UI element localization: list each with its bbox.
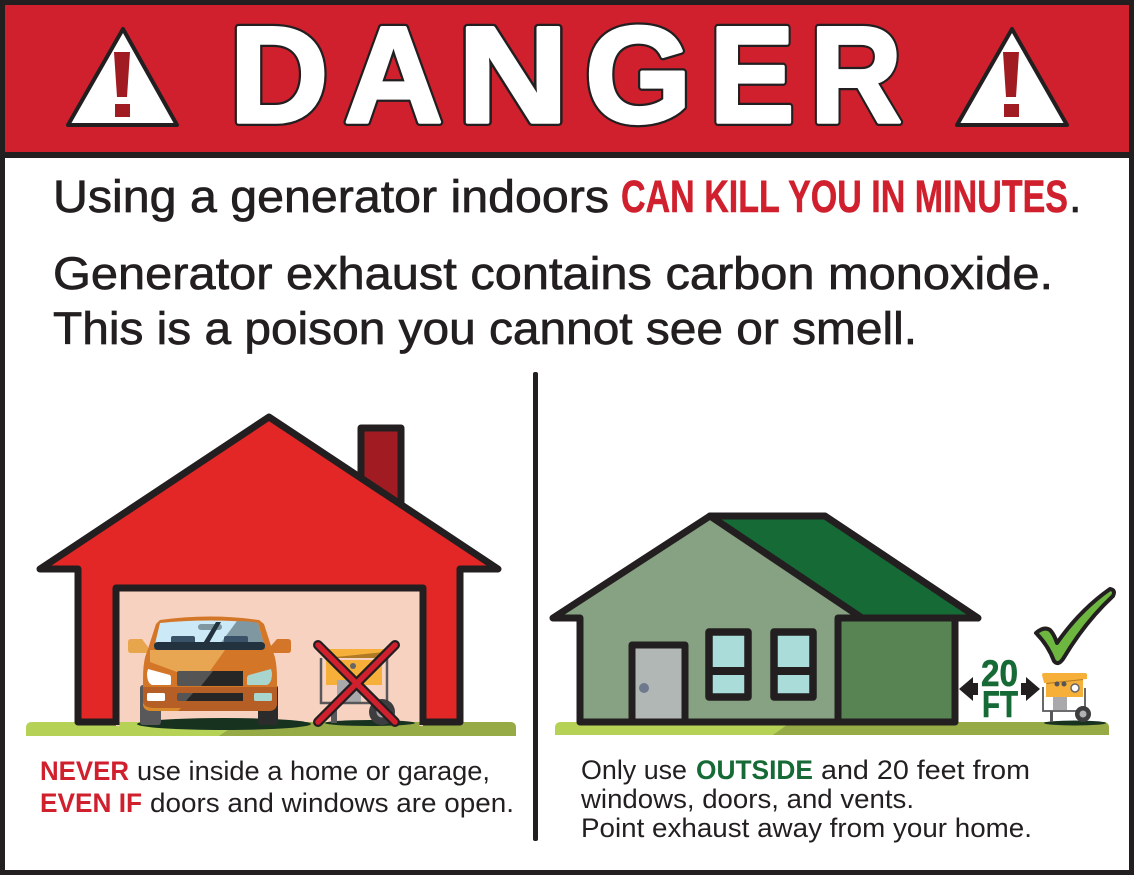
text block: carbon monoxide warning: This is a poison you cannot see or smell. — [53, 303, 917, 354]
icon: chimney — [361, 428, 401, 512]
caption: only use outside: Only use — [581, 755, 687, 785]
red house — [40, 417, 498, 722]
heading: DANGER: A — [344, 0, 443, 152]
icon: left warning triangle — [68, 29, 177, 125]
panel: safe outdoor use — [553, 516, 1114, 843]
label: 20 — [981, 653, 1018, 694]
heading: DANGER: N — [458, 0, 568, 152]
statement: can kill you in minutes: Using a generator indoors — [53, 171, 609, 222]
caption: only use outside — [580, 755, 1032, 843]
window left — [709, 632, 748, 697]
text block: carbon monoxide warning — [53, 248, 1053, 354]
heading: DANGER: E — [710, 0, 794, 152]
text block: carbon monoxide warning: Generator exhaust contains carbon monoxide. — [53, 248, 1053, 299]
label — [981, 653, 1018, 725]
heading: DANGER: D — [230, 0, 328, 152]
green house body — [553, 516, 862, 722]
side garage — [838, 618, 955, 722]
label: FT — [982, 684, 1018, 725]
heading: DANGER: G — [585, 0, 692, 152]
caption: only use outside: Point exhaust away from your home. — [581, 813, 1032, 843]
panel: unsafe indoor use — [26, 417, 516, 818]
ground — [555, 722, 1109, 735]
heading: DANGER: R — [810, 0, 902, 152]
door — [632, 645, 685, 722]
caption: never use inside — [40, 756, 514, 818]
caption: only use outside: windows, doors, and vents. — [580, 784, 914, 814]
icon: green check mark — [1036, 589, 1114, 663]
caption: only use outside: OUTSIDE — [696, 755, 813, 785]
heading: DANGER: E — [710, 0, 794, 152]
caption: only use outside: and 20 feet from — [821, 755, 1030, 785]
arrow right — [1021, 677, 1040, 701]
center divider — [533, 372, 538, 841]
heading: DANGER — [230, 0, 902, 152]
icon: generator — [1042, 673, 1106, 726]
distance marker: 20 ft — [959, 653, 1040, 725]
heading: DANGER: R — [810, 0, 902, 152]
caption: never use inside: use inside a home or garage, — [137, 756, 490, 786]
green roof — [710, 516, 978, 618]
window right — [774, 632, 813, 697]
caption: never use inside: doors and windows are open. — [150, 788, 514, 818]
arrow left — [959, 677, 978, 701]
ground — [26, 722, 516, 736]
heading: DANGER: G — [585, 0, 692, 152]
statement: can kill you in minutes: . — [1069, 171, 1082, 222]
icon: orange car — [128, 616, 291, 725]
caption: never use inside: EVEN IF — [40, 788, 142, 818]
garage opening — [116, 588, 423, 736]
heading: DANGER: A — [344, 0, 443, 152]
statement: can kill you in minutes — [53, 171, 1082, 222]
icon: generator crossed out — [318, 645, 415, 726]
car shadow — [137, 718, 311, 730]
heading: DANGER: D — [230, 0, 328, 152]
icon: red x — [318, 645, 395, 722]
banner: danger — [0, 0, 1134, 158]
heading: DANGER: N — [458, 0, 568, 152]
caption: never use inside: NEVER — [40, 756, 129, 786]
icon: right warning triangle — [957, 29, 1067, 125]
